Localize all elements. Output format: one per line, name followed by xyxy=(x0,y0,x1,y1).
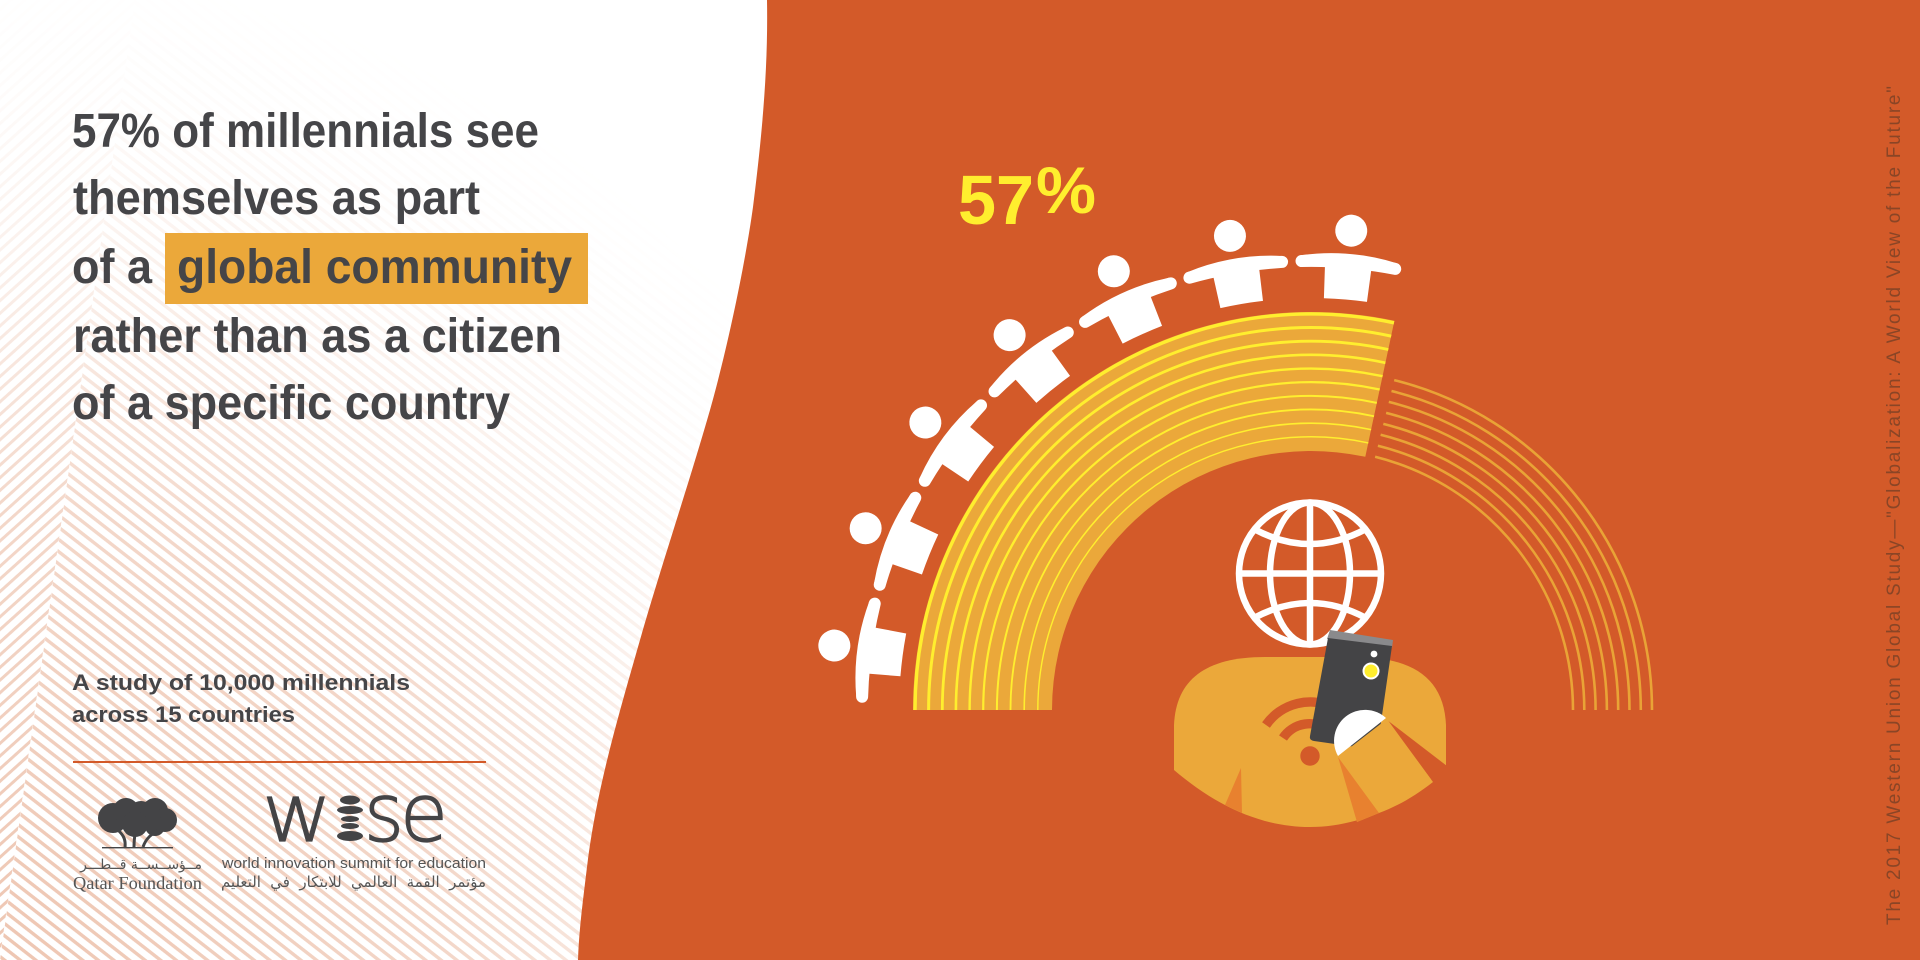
logo: WISE: s xyxy=(364,767,404,860)
panel: orange curved background xyxy=(578,0,1920,960)
logo: Qatar Foundation: Qatar Foundation xyxy=(73,873,202,893)
background: white panel with chevron stripes xyxy=(0,135,682,960)
big number: 57% xyxy=(958,153,1096,239)
icon: tree xyxy=(98,798,177,848)
heading: of a xyxy=(72,241,152,294)
phone xyxy=(1310,630,1393,750)
collar fold xyxy=(1338,757,1379,822)
icon: stacked stones xyxy=(337,796,363,841)
collar fold xyxy=(1225,768,1242,813)
logo: WISE: مؤتمر القمة العالمي للابتكار في التعليم xyxy=(221,873,486,892)
study note: across 15 countries xyxy=(72,702,295,727)
logo: Qatar Foundation xyxy=(73,798,202,893)
sleeve shadow xyxy=(1387,720,1447,782)
logo: WISE: w xyxy=(262,767,332,860)
logo: WISE xyxy=(221,767,486,892)
hand xyxy=(1334,710,1386,756)
big number: 57%: % xyxy=(1036,153,1096,227)
body xyxy=(1174,657,1446,827)
logo: Qatar Foundation: مــؤســســة قــطـــر xyxy=(79,857,202,873)
logo: WISE: e xyxy=(400,767,448,860)
logo: WISE: world innovation summit for education xyxy=(221,855,486,872)
row of people holding hands along the arc xyxy=(812,211,1400,702)
chart: 57% filled arc xyxy=(913,312,1394,710)
highlight box: global community: global community xyxy=(177,241,572,294)
illustration: person with smartphone xyxy=(1174,630,1447,827)
chart: remaining 43% outline arc xyxy=(1375,380,1652,710)
heading: of a specific country xyxy=(72,377,510,430)
big number: 57%: 57 xyxy=(958,161,1034,239)
icon: wifi xyxy=(1266,702,1335,738)
study note: A study of 10,000 millennials xyxy=(72,670,410,695)
heading xyxy=(72,105,588,430)
heading: themselves as part xyxy=(73,172,480,225)
study note xyxy=(72,670,410,727)
forearm xyxy=(1338,719,1433,822)
icon: globe xyxy=(1239,502,1381,644)
source note: The 2017 Western Union Global Study—"Globalization: A World View of the Future" xyxy=(1884,86,1905,925)
heading: rather than as a citizen xyxy=(73,310,562,363)
heading: 57% of millennials see xyxy=(72,105,539,158)
